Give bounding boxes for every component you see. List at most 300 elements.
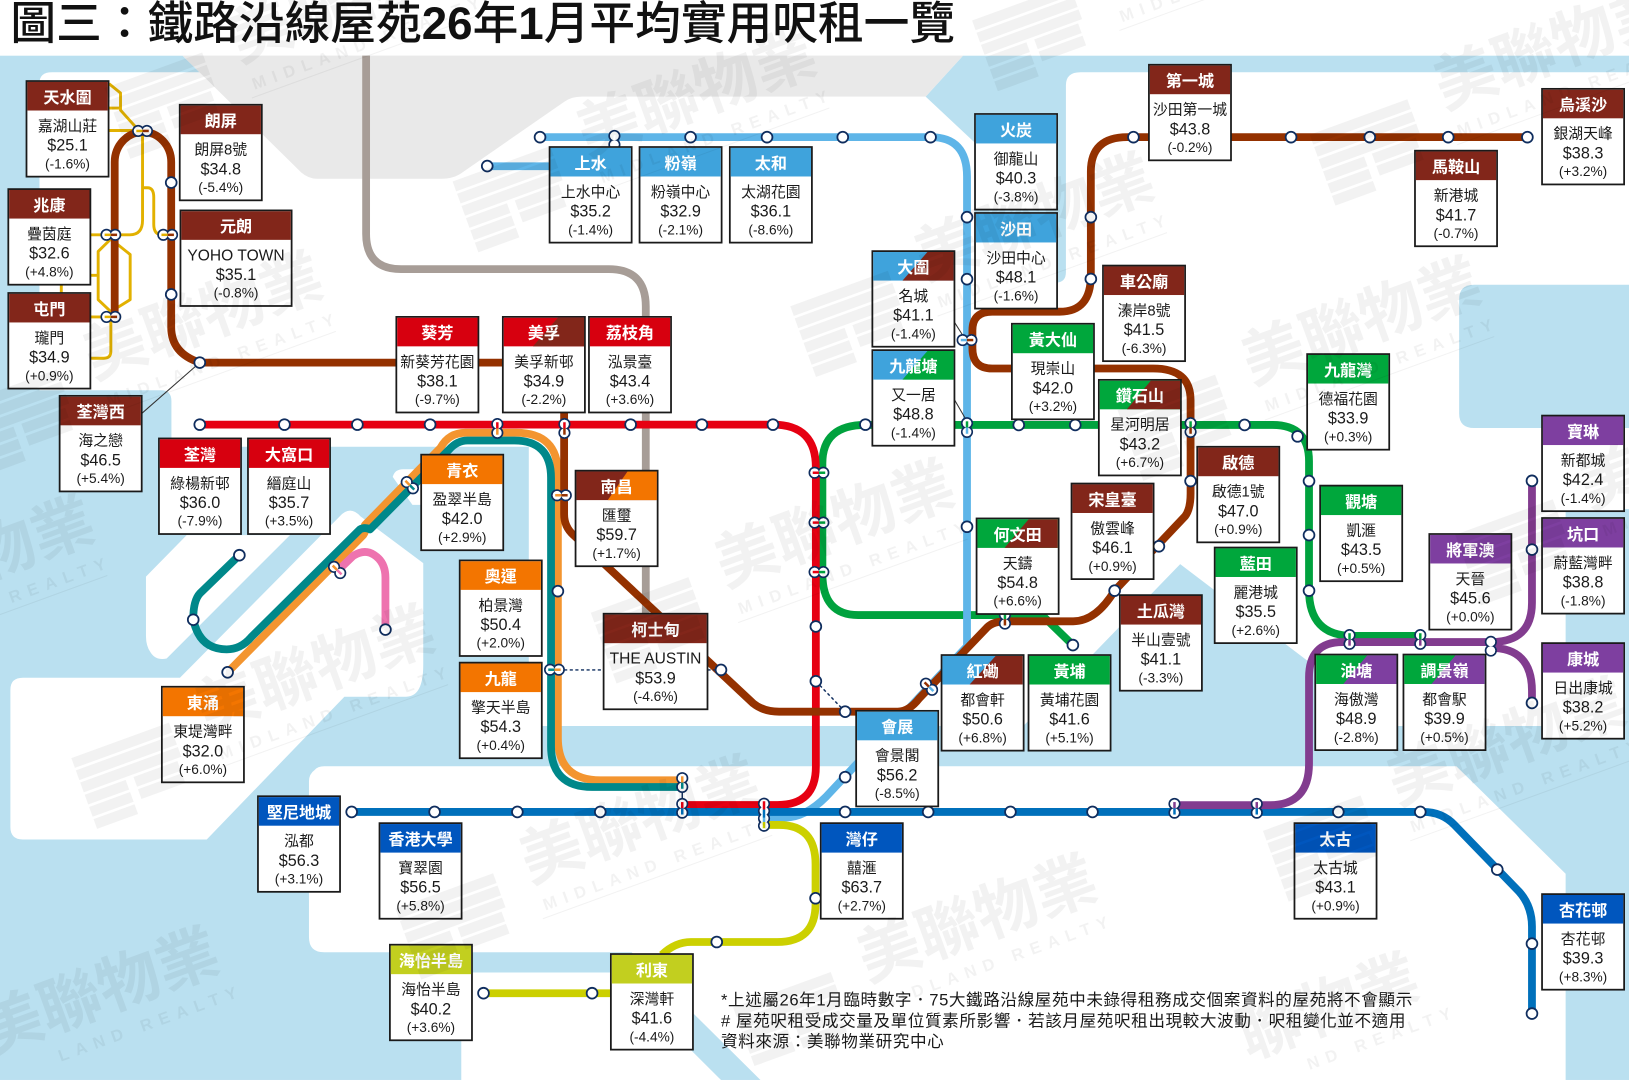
watermarks: 美聯物業 (1233, 247, 1491, 398)
rent: $42.0 (442, 510, 482, 528)
estate: 御龍山 (994, 151, 1038, 168)
estate: 半山壹號 (1131, 632, 1191, 649)
card: 屯門 (8, 293, 90, 389)
rent: $32.6 (29, 245, 70, 263)
rent: $54.3 (480, 718, 521, 736)
rent: $38.3 (1563, 144, 1603, 162)
card: 荔枝角 (589, 317, 671, 412)
card: 元朗 (180, 210, 292, 306)
change: (-1.4%) (891, 326, 936, 341)
rent: $48.8 (893, 406, 934, 424)
estate: 東堤灣畔 (173, 724, 233, 741)
rent: $59.7 (596, 526, 637, 544)
rent: $39.3 (1563, 950, 1603, 968)
rent: $32.9 (660, 203, 701, 221)
estate: 德福花園 (1318, 390, 1378, 408)
card: 上水 (550, 147, 632, 243)
rent: $40.3 (996, 170, 1036, 188)
change: (+3.1%) (275, 872, 323, 887)
card: 將軍澳 (1429, 534, 1511, 630)
change: (+5.1%) (1045, 730, 1094, 745)
estate: 粉嶺中心 (651, 184, 710, 201)
estate: YOHO TOWN (187, 247, 285, 264)
card: 車公廟 (1103, 266, 1185, 361)
footnotes: *上述屬26年1月臨時數字．75大鐵路沿線屋苑中未錄得租務成交個案資料的屋苑將不會顯示 (721, 991, 1413, 1010)
change: (+1.7%) (592, 546, 641, 561)
change: (-8.5%) (875, 786, 920, 801)
header: 火炭 (1000, 122, 1032, 140)
change: (+6.0%) (179, 762, 227, 777)
rent: $45.6 (1450, 590, 1491, 608)
rent: $41.6 (1049, 711, 1090, 729)
watermarks: MIDLAND REALTY (104, 308, 344, 410)
line: Island (blue) (352, 812, 1532, 1014)
header: 九龍 (485, 669, 517, 688)
card: 油塘 (1315, 655, 1397, 750)
estate: 現崇山 (1031, 361, 1075, 378)
card: 南昌 (576, 471, 658, 566)
card: 黃埔 (1029, 655, 1111, 751)
change: (-1.4%) (1561, 491, 1606, 506)
header: 荃灣西 (77, 403, 125, 422)
card: 九龍 (460, 663, 542, 758)
estate: 美孚新邨 (514, 354, 574, 371)
card: 堅尼地城 (258, 796, 340, 892)
change: (+2.0%) (477, 636, 525, 651)
rent: $56.5 (400, 879, 441, 897)
rent: $36.0 (180, 494, 220, 512)
estate: 縉庭山 (267, 475, 311, 492)
estate: 泓景臺 (608, 354, 652, 371)
header: 黃大仙 (1029, 332, 1077, 350)
change: (+5.4%) (76, 471, 125, 486)
change: (+0.3%) (1324, 429, 1372, 444)
rent: $54.8 (997, 574, 1038, 592)
card: 沙田 (975, 213, 1057, 309)
card: 紅磡 (942, 655, 1024, 751)
rent: $35.2 (570, 203, 611, 221)
change: (+0.9%) (1088, 559, 1137, 574)
watermarks: MIDLAND REALTY (540, 812, 780, 914)
line: Tseung Kwan O (purple) (1174, 481, 1532, 805)
estate: 太古城 (1313, 860, 1358, 877)
change: (-0.2%) (1167, 140, 1212, 155)
card: 美孚 (503, 317, 585, 412)
change: (-0.8%) (214, 286, 259, 301)
change: (-3.8%) (994, 189, 1039, 204)
change: (+0.0%) (1446, 609, 1495, 624)
estate: 傲雲峰 (1090, 520, 1135, 537)
change: (+0.5%) (1420, 730, 1469, 745)
rent: $34.9 (524, 373, 564, 391)
header: 將軍澳 (1446, 541, 1495, 560)
estate: 溱岸8號 (1118, 302, 1171, 319)
line: Kwun Tong (green) (822, 425, 1420, 645)
estate: 盈翠半島 (433, 492, 492, 509)
header: 黃埔 (1053, 662, 1086, 681)
change: (+2.6%) (1232, 623, 1280, 638)
estate: 會景閣 (875, 748, 919, 765)
estate: 銀湖天峰 (1553, 126, 1613, 143)
card: 利東 (611, 954, 693, 1050)
watermarks: LAND REALTY (56, 981, 246, 1066)
change: (-5.4%) (198, 180, 243, 195)
estate: 朗屏8號 (194, 142, 247, 159)
rent: $46.5 (80, 451, 121, 469)
estate: 杏花邨 (1561, 931, 1606, 948)
card: 烏溪沙 (1542, 89, 1624, 184)
rent: $35.1 (216, 266, 256, 284)
card: 第一城 (1149, 65, 1231, 160)
change: (+3.2%) (1559, 164, 1607, 179)
line: East Rail (light blue) (487, 137, 967, 818)
change: (+8.3%) (1559, 969, 1607, 984)
estate: 囍滙 (847, 860, 877, 877)
card: 大圍 (872, 251, 954, 347)
header: 利東 (636, 961, 668, 980)
estate: 新港城 (1434, 188, 1478, 205)
change: (-2.1%) (658, 222, 703, 237)
card: 荃灣 (159, 438, 241, 534)
estate: 綠楊新邨 (170, 475, 230, 492)
header: 粉嶺 (664, 154, 697, 173)
card: 九龍塘 (872, 350, 954, 446)
watermarks: 美聯物業 (849, 845, 1107, 995)
header: 紅磡 (967, 662, 999, 681)
estate: 瓏門 (35, 330, 64, 347)
change: (-2.2%) (521, 392, 566, 407)
header: 大窩口 (265, 445, 313, 464)
line: Tuen Ma (brown) (115, 132, 1527, 712)
card: 杏花邨 (1542, 894, 1624, 990)
estate: 名城 (899, 288, 928, 305)
header: 何文田 (993, 525, 1042, 544)
header: 烏溪沙 (1559, 96, 1607, 115)
card: 坑口 (1542, 518, 1624, 614)
estate: 啟德1號 (1212, 483, 1265, 501)
rent: $43.1 (1315, 879, 1356, 897)
rent: $56.2 (877, 766, 917, 784)
rent: $35.7 (269, 494, 309, 512)
footnotes (721, 991, 1413, 1051)
header: 康城 (1567, 650, 1599, 669)
header: 會展 (881, 718, 913, 737)
header: 車公廟 (1120, 272, 1168, 291)
header: 太和 (755, 155, 787, 173)
card: 奧運 (460, 560, 542, 656)
watermarks: 美聯物業 (706, 450, 964, 600)
card: 馬鞍山 (1415, 151, 1497, 246)
card: 東涌 (162, 687, 244, 782)
station markers (166, 132, 1537, 1019)
estate: 都會軒 (960, 692, 1005, 709)
header: 天水圍 (43, 89, 92, 107)
header: 朗屏 (205, 113, 237, 131)
rent: $42.4 (1563, 471, 1603, 489)
card: 藍田 (1215, 548, 1297, 643)
rent: $34.9 (29, 349, 70, 367)
estate: THE AUSTIN (610, 651, 701, 668)
estate: 日出康城 (1553, 680, 1613, 697)
card: 香港大學 (380, 823, 462, 919)
header: 啟德 (1222, 455, 1254, 473)
estate: 都會駅 (1422, 691, 1467, 708)
change: (+3.2%) (1029, 399, 1077, 414)
change: (-9.7%) (415, 392, 460, 407)
header: 九龍灣 (1324, 361, 1372, 380)
card: 灣仔 (821, 823, 903, 919)
rent: $34.8 (201, 160, 241, 178)
estate: 天晉 (1456, 572, 1485, 588)
watermarks: 美聯物業 (187, 596, 445, 746)
card: 大窩口 (248, 438, 330, 534)
header: 青衣 (446, 461, 478, 480)
estate: 凱滙 (1346, 522, 1376, 539)
header: 南昌 (600, 478, 633, 496)
rent: $35.5 (1235, 603, 1276, 621)
line: Tsuen Wan (red) (200, 425, 816, 805)
header: 美孚 (528, 324, 560, 343)
card: 葵芳 (396, 317, 478, 412)
change: (+5.2%) (1559, 718, 1607, 733)
change: (+5.8%) (396, 898, 445, 913)
watermarks: MIDLAND REALTY (1262, 313, 1502, 416)
change: (-1.6%) (994, 288, 1039, 303)
line: planned northern link (grey) (366, 56, 646, 614)
rent: $41.7 (1436, 206, 1476, 224)
change: (+3.6%) (407, 1020, 455, 1035)
rent: $43.8 (1170, 120, 1210, 138)
header: 大圍 (897, 259, 929, 277)
change: (-7.9%) (178, 514, 222, 529)
change: (-2.8%) (1334, 730, 1379, 745)
change: (-3.3%) (1138, 670, 1183, 685)
header: 調景嶺 (1420, 662, 1469, 680)
rent: $38.1 (417, 373, 458, 391)
estate: 新葵芳花園 (400, 354, 474, 371)
rent: $40.2 (411, 1000, 451, 1018)
header: 荔枝角 (606, 324, 654, 343)
header: 兆康 (33, 196, 65, 215)
rent: $41.1 (1141, 651, 1181, 669)
rent: $41.1 (893, 307, 934, 325)
rent: $41.5 (1124, 321, 1164, 339)
rent: $38.2 (1563, 699, 1603, 717)
rent: $43.2 (1120, 435, 1160, 453)
header: 九龍塘 (889, 357, 938, 376)
card: 太和 (730, 147, 812, 243)
header: 油塘 (1340, 661, 1372, 680)
estate: 麗港城 (1233, 584, 1278, 601)
change: (-0.7%) (1434, 226, 1478, 241)
header: 觀塘 (1345, 492, 1377, 511)
change: (-1.6%) (45, 156, 90, 171)
change: (-1.4%) (891, 425, 936, 440)
change: (-8.6%) (748, 222, 793, 237)
header: 第一城 (1166, 72, 1214, 91)
footnotes: 資料來源：美聯物業研究中心 (721, 1032, 944, 1051)
card: 太古 (1294, 823, 1377, 919)
estate: 匯璽 (602, 509, 632, 525)
estate: 柏景灣 (478, 597, 523, 614)
change: (+0.9%) (1311, 898, 1360, 913)
card: 兆康 (8, 189, 90, 285)
rent: $46.1 (1092, 539, 1133, 557)
change: (+2.9%) (438, 530, 486, 545)
header: 荃灣 (184, 445, 216, 464)
card: 青衣 (421, 455, 503, 550)
estate: 蔚藍灣畔 (1553, 555, 1613, 572)
rent: $48.9 (1336, 710, 1377, 728)
estate: 太湖花園 (741, 184, 801, 201)
card: 會展 (856, 711, 938, 806)
watermarks: MIDLAND REALTY (216, 661, 456, 764)
change: (-4.6%) (633, 689, 678, 704)
estate: 擎天半島 (471, 700, 531, 717)
line: Tung Chung (orange) (228, 433, 683, 780)
rent: $42.0 (1033, 379, 1073, 397)
card: 觀塘 (1320, 486, 1402, 581)
card: 寶琳 (1542, 416, 1624, 511)
header: 藍田 (1240, 555, 1272, 573)
header: 鑽石山 (1116, 387, 1164, 406)
line: South Island (lime) (484, 825, 816, 993)
card: 天水圍 (26, 81, 109, 177)
watermarks: 美聯物業 (906, 144, 1164, 294)
change: (+3.6%) (606, 392, 654, 407)
header: 海怡半島 (399, 952, 463, 971)
rent: $43.4 (610, 373, 650, 391)
header: 堅尼地城 (267, 803, 331, 822)
card: 宋皇臺 (1072, 484, 1154, 579)
card: 啟德 (1197, 447, 1279, 542)
rent: $47.0 (1218, 502, 1259, 520)
watermarks: ND REALTY (1304, 1001, 1461, 1074)
header: 上水 (575, 155, 607, 173)
watermarks: MIDLAND REALTY (878, 910, 1118, 1013)
watermarks: 聯物業 (1229, 944, 1429, 1072)
rent: $36.1 (751, 203, 791, 221)
header: 坑口 (1567, 525, 1599, 544)
watermarks: MIDLAND REALTY (935, 209, 1175, 312)
estate: 泓都 (284, 833, 314, 850)
footnotes: # 屋苑呎租受成交量及單位質素所影響．若該月屋苑呎租出現較大波動．呎租變化並不適用 (721, 1011, 1406, 1030)
change: (-6.3%) (1122, 341, 1167, 356)
rent: $56.3 (279, 852, 319, 870)
estate: 海傲灣 (1334, 691, 1379, 708)
header: 屯門 (33, 301, 65, 319)
rent: $50.6 (962, 711, 1003, 729)
watermarks: 美聯物業 (1379, 668, 1629, 818)
header: 元朗 (220, 218, 252, 236)
watermarks: 美聯物業 (75, 242, 333, 392)
estate: 星河明居 (1110, 417, 1170, 434)
change: (-1.8%) (1561, 593, 1606, 608)
estate: 海怡半島 (401, 982, 461, 999)
card: 調景嶺 (1403, 655, 1486, 750)
connector lines (142, 322, 965, 799)
header: 寶琳 (1567, 422, 1599, 441)
watermarks: MIDLAND REALTY (597, 84, 837, 187)
card: 荃灣西 (60, 396, 142, 491)
estate: 寶翠園 (398, 859, 443, 877)
header: 土瓜灣 (1137, 603, 1185, 621)
watermarks: MIDLAND REALTY (736, 516, 975, 618)
card: 粉嶺 (640, 147, 722, 243)
card: 康城 (1542, 643, 1624, 739)
estate: 上水中心 (561, 184, 620, 201)
change: (-1.4%) (568, 222, 613, 237)
rent: $63.7 (842, 879, 882, 897)
change: (+6.8%) (958, 730, 1007, 745)
header: 太古 (1319, 831, 1352, 849)
rent: $50.4 (480, 616, 521, 634)
estate: 沙田第一城 (1153, 101, 1227, 119)
estate: 天鑄 (1003, 555, 1033, 572)
header: 沙田 (1000, 221, 1032, 239)
rent: $48.1 (996, 269, 1036, 287)
card: 何文田 (977, 518, 1059, 614)
rent: $53.9 (635, 669, 676, 687)
rent: $41.6 (632, 1010, 672, 1028)
header: 東涌 (187, 694, 219, 713)
estate: 沙田中心 (986, 250, 1046, 267)
watermarks: 美聯物業 (568, 19, 826, 169)
watermarks: 美聯物業 (511, 746, 769, 896)
change: (+0.5%) (1337, 561, 1385, 576)
rent: $43.5 (1341, 541, 1381, 559)
change: (+0.9%) (25, 368, 74, 383)
header: 宋皇臺 (1088, 490, 1137, 509)
interchange markers (101, 126, 1496, 831)
header: 杏花邨 (1559, 901, 1607, 920)
change: (+4.8%) (25, 264, 74, 279)
card: 朗屏 (180, 105, 262, 200)
change: (+0.4%) (477, 738, 525, 753)
card: 火炭 (975, 114, 1057, 210)
rent: $32.0 (183, 742, 223, 760)
card: 海怡半島 (390, 945, 472, 1040)
card: 鑽石山 (1099, 380, 1181, 475)
line: Disneyland (pink) (339, 552, 385, 630)
estate: 嘉湖山莊 (38, 117, 97, 135)
header: 灣仔 (846, 831, 878, 849)
header: 奧運 (485, 568, 517, 586)
card: 柯士甸 (604, 614, 707, 709)
card: 土瓜灣 (1120, 595, 1202, 691)
estate: 深灣軒 (630, 991, 674, 1008)
card: 九龍灣 (1307, 354, 1389, 450)
header: 香港大學 (388, 831, 453, 849)
change: (-4.4%) (629, 1029, 674, 1044)
estate: 又一居 (891, 387, 936, 404)
change: (+6.7%) (1116, 455, 1164, 470)
rent: $25.1 (47, 137, 88, 155)
line: Tuen Ma (teal line, airport) (193, 441, 683, 787)
change: (+6.6%) (993, 594, 1042, 609)
card: 黃大仙 (1012, 324, 1094, 419)
change: (+3.5%) (265, 514, 313, 529)
rent: $39.9 (1424, 710, 1465, 728)
estate: 新都城 (1561, 452, 1606, 469)
line: light rail (yellow) (61, 84, 167, 358)
estate: 黃埔花園 (1040, 692, 1099, 709)
estate: 疊茵庭 (27, 226, 72, 243)
estate: 海之戀 (78, 433, 123, 450)
header: 馬鞍山 (1432, 157, 1480, 176)
change: (+2.7%) (838, 898, 886, 913)
change: (+0.9%) (1214, 522, 1262, 537)
